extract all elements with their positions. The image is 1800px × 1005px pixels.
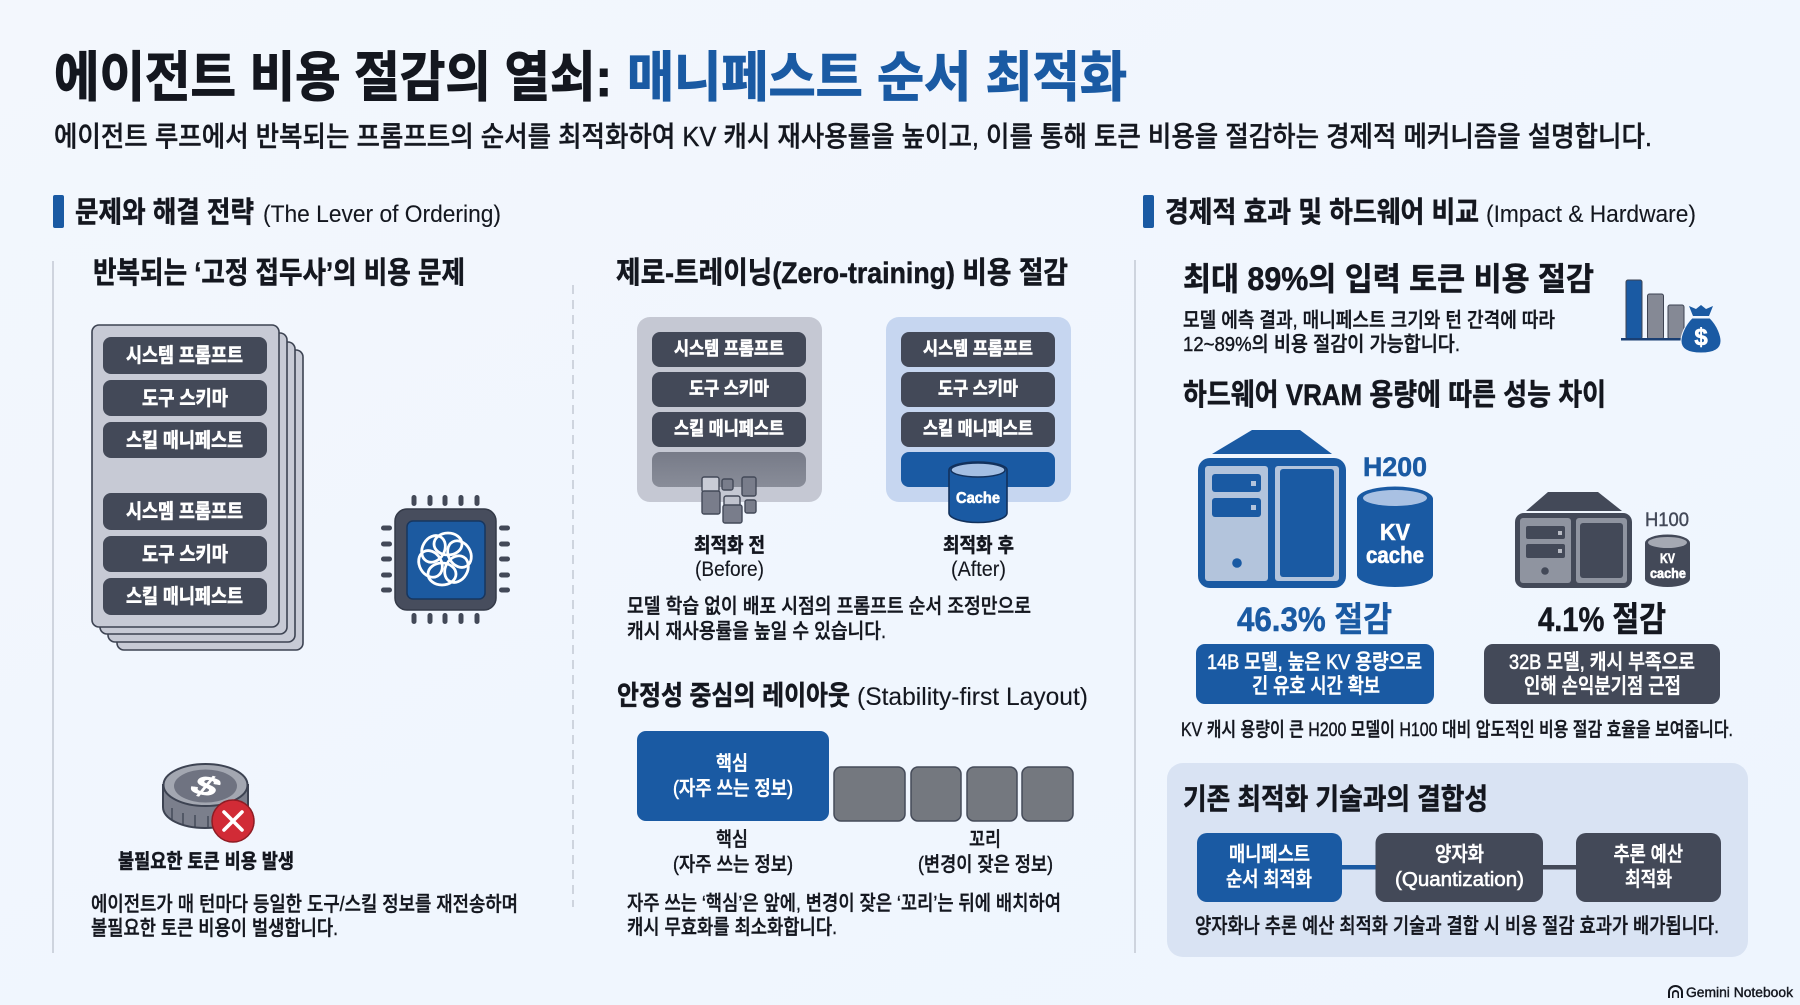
stacked prompt pages: 시스멤 프롬프트 xyxy=(126,500,243,523)
panel: max 89% savings xyxy=(1183,261,1721,356)
icon: H100 server xyxy=(1515,492,1632,588)
label: after: 최적화 후 xyxy=(943,534,1014,557)
box: inference budget: 최적화 xyxy=(1625,868,1672,891)
description: token cost: 볼필요한 토큰 비용이 벌생합니다. xyxy=(91,917,338,940)
icon: H100 KV cache: H100 xyxy=(1645,510,1689,531)
connectors xyxy=(1342,865,1576,870)
description: stability-first: 자주 쓰는 ‘핵심’은 앞에, 변경이 잦은 ‘꼬리’는 뒤에 배치하여 xyxy=(627,892,1061,915)
description: max savings xyxy=(1183,309,1555,356)
callout: H200: 긴 유호 시간 확보 xyxy=(1252,675,1380,698)
callout: H200 xyxy=(1196,644,1434,704)
label: after: (After) xyxy=(951,558,1006,581)
stacked prompt pages: 도구 스키마 xyxy=(142,543,228,566)
stat: 4.1%: 4.1% 절감 xyxy=(1538,601,1666,639)
stacked prompt pages: 스킬 매니페스트 xyxy=(126,585,243,608)
description: max savings: 모델 에측 결과, 매니페스트 크기와 턴 간격에 따라 xyxy=(1183,309,1555,332)
heading: stability-first: (Stability-first Layout) xyxy=(857,683,1088,711)
diagram: after optimization: 시스템 프롬프트 xyxy=(923,338,1033,359)
stat: 46.3%: 46.3% 절감 xyxy=(1237,601,1392,639)
icon: H200 KV cache: H200 xyxy=(1363,452,1427,482)
watermark: Gemini Notebook: Gemini Notebook xyxy=(1686,985,1793,1000)
description: stability-first xyxy=(627,892,1061,939)
section heading: the lever of ordering: (The Lever of Ordering) xyxy=(263,201,501,228)
description: stability-first: 캐시 무효화를 최소화합니다. xyxy=(627,916,837,939)
icon: H200 server xyxy=(1198,430,1346,588)
caption: unnecessary token cost: 불필요한 토큰 비용 발생 xyxy=(118,850,294,873)
box: manifest ordering: 매니페스트 xyxy=(1229,843,1310,866)
box: manifest ordering xyxy=(1197,833,1342,902)
stacked prompt pages: 스킬 매니페스트 xyxy=(126,429,243,452)
label: before xyxy=(694,534,765,581)
icon: token coin with X xyxy=(163,764,254,842)
section heading: impact and hardware: 경제적 효과 및 하드웨어 비교 xyxy=(1165,196,1479,229)
box: quantization xyxy=(1376,833,1543,902)
icon: LLM chip xyxy=(381,495,510,624)
title: 매니페스트 순서 최적화 xyxy=(627,48,1127,108)
description: token cost: 에이전트가 매 턴마다 등일한 도구/스킬 정보를 재전송하며 xyxy=(91,893,518,916)
icon: H200 KV cache xyxy=(1357,452,1433,587)
section heading: impact and hardware: (Impact & Hardware) xyxy=(1486,201,1696,228)
section heading: the lever of ordering xyxy=(53,195,501,229)
icon: bars and money bag: $ xyxy=(1694,324,1708,351)
box: quantization: 양자화 xyxy=(1435,843,1484,866)
box: quantization: (Quantization) xyxy=(1395,868,1524,891)
label: tail xyxy=(918,828,1053,876)
description: zero-training: 모델 학습 없이 배포 시점의 프롬프트 순서 조정만으로 xyxy=(627,595,1031,618)
label: before: (Before) xyxy=(695,558,764,581)
callout: H200: 14B 모델, 높은 KV 용량으로 xyxy=(1207,651,1422,674)
callout: H100: 32B 모델, 캐시 부족으로 xyxy=(1509,651,1695,674)
icon: bars and money bag xyxy=(1621,280,1721,353)
description: max savings: 12~89%의 비용 절감이 가능합니다. xyxy=(1183,333,1460,356)
label: tail: (변경이 잦은 정보) xyxy=(918,853,1053,876)
description: zero-training: 캐시 재사용률을 높일 수 있습니다. xyxy=(627,620,886,643)
heading: fixed prefix: 반복되는 ‘고정 접두사’의 비용 문제 xyxy=(93,257,465,290)
heading: stability-first xyxy=(617,681,1088,711)
diagram: after optimization: 스킬 매니페스트 xyxy=(923,418,1033,439)
icon: H200 KV cache: KV xyxy=(1380,519,1411,545)
section heading: impact and hardware xyxy=(1143,195,1696,229)
panel: stability-first layout xyxy=(617,681,1088,939)
panel: hardware VRAM comparison xyxy=(1181,379,1733,741)
callout: H100: 인해 손익분기점 근접 xyxy=(1524,675,1681,698)
label: core: (자주 쓰는 정보) xyxy=(673,853,793,876)
subtitle: 에이전트 루프에서 반복되는 프롬프트의 순서를 최적화하여 KV 캐시 재사용률을 높이고, 이를 통해 토큰 비용을 절감하는 경제적 메커니즘을 설명합니다. xyxy=(54,121,1652,152)
diagram: core block: 핵심 xyxy=(716,752,748,775)
description: token cost xyxy=(91,893,518,940)
diagram: after optimization: Cache xyxy=(956,490,1000,507)
title: 에이전트 비용 절감의 열쇠: xyxy=(54,48,612,108)
heading: VRAM: 하드웨어 VRAM 용량에 따른 성능 차이 xyxy=(1183,379,1606,412)
diagram: before optimization xyxy=(637,317,822,523)
diagram: core block xyxy=(637,731,829,821)
heading: combination: 기존 최적화 기술과의 결합성 xyxy=(1183,783,1488,816)
panel: zero-training cost savings xyxy=(616,257,1071,643)
icon: H100 KV cache: KV xyxy=(1660,550,1676,566)
label: after xyxy=(943,534,1014,581)
heading: stability-first: 안정성 중심의 레이아웃 xyxy=(617,681,850,711)
label: core xyxy=(673,828,793,876)
diagram: tail blocks xyxy=(834,767,1073,821)
label: before: 최적화 전 xyxy=(694,534,765,557)
panel: fixed prefix cost problem xyxy=(91,257,518,940)
diagram: before optimization: 도구 스키마 xyxy=(689,378,769,399)
stacked prompt pages: 시스템 프롬프트 xyxy=(126,344,243,367)
title xyxy=(54,48,1127,108)
icon: H200 KV cache: cache xyxy=(1366,542,1424,568)
heading: max savings: 최대 89%의 입력 토큰 비용 절감 xyxy=(1183,261,1594,297)
diagram: before optimization: 스킬 매니페스트 xyxy=(674,418,784,439)
box: inference budget: 추론 예산 xyxy=(1614,843,1683,866)
diagram: after optimization: 도구 스키마 xyxy=(938,378,1018,399)
box: inference budget xyxy=(1576,833,1721,902)
icon: token coin with X: $ xyxy=(182,770,229,803)
heading: zero-training: 제로-트레이닝(Zero-training) 비용 절감 xyxy=(616,257,1068,290)
icon: H100 KV cache: cache xyxy=(1650,565,1686,581)
description: zero-training xyxy=(627,595,1031,643)
stacked prompt pages xyxy=(92,325,303,650)
label: core: 핵심 xyxy=(716,828,748,851)
section heading: the lever of ordering: 문제와 해결 전략 xyxy=(75,196,254,229)
box: manifest ordering: 순서 최적화 xyxy=(1226,868,1312,891)
diagram: before optimization: 시스템 프롬프트 xyxy=(674,338,784,359)
diagram: after optimization xyxy=(886,317,1071,522)
icon: H100 KV cache xyxy=(1645,510,1690,587)
stacked prompt pages: 도구 스키마 xyxy=(142,387,228,410)
callout: H100 xyxy=(1484,644,1720,704)
diagram: core block: (자주 쓰는 정보) xyxy=(673,777,793,800)
panel: combination with existing techniques xyxy=(1167,763,1748,957)
label: tail: 꼬리 xyxy=(969,828,1001,851)
